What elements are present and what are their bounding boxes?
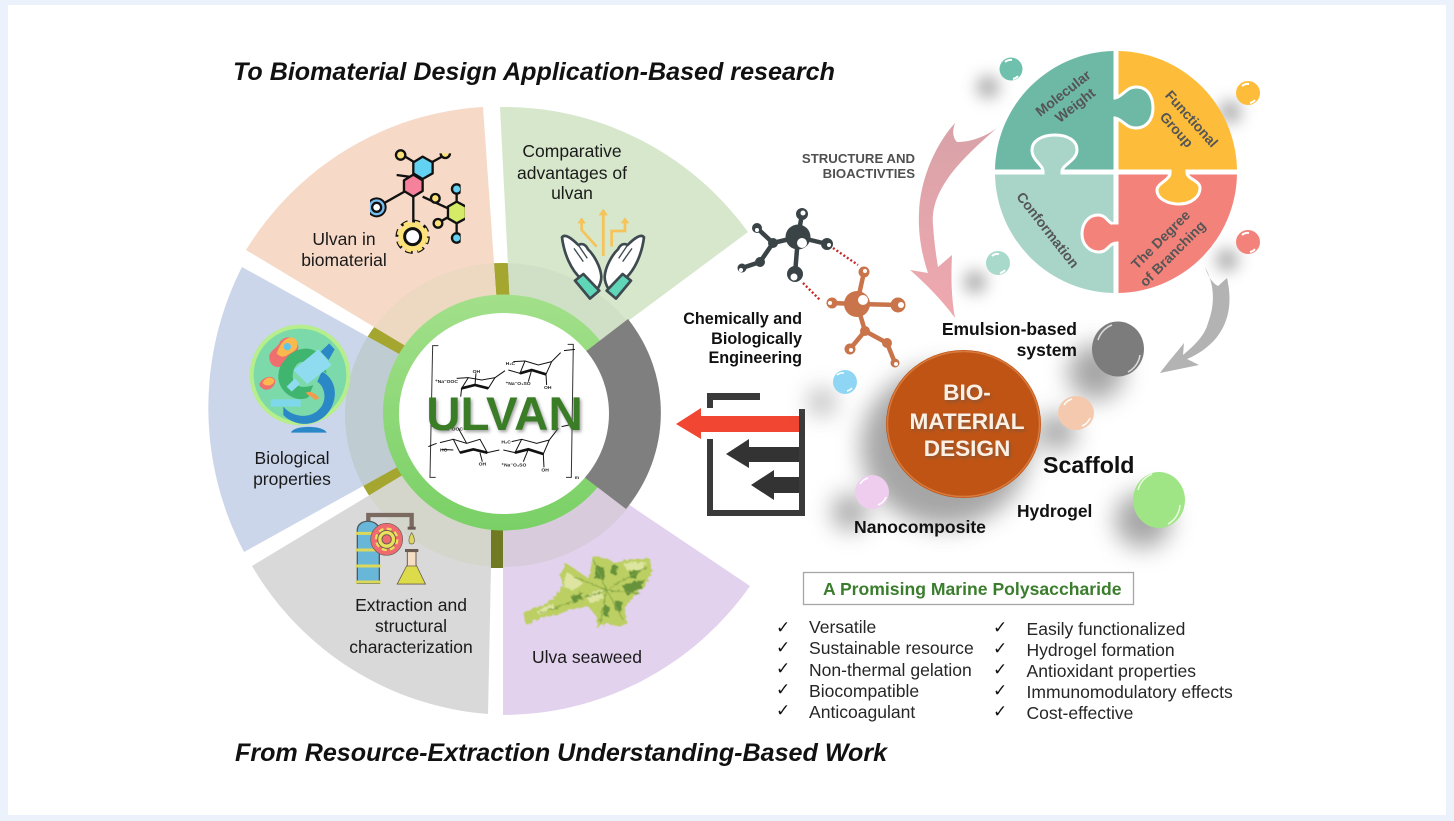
chemical structure of ulvan: m (575, 475, 580, 481)
checklist: right column: Antioxidant properties (1026, 661, 1196, 681)
puzzle piece: molecular weight (995, 51, 1153, 170)
chemical structure of ulvan: ⁺Na⁻OOC (440, 427, 463, 433)
label: Biological properties: Biological (255, 448, 329, 468)
puzzle tab: functional group into branching (1157, 167, 1200, 204)
chemical structure of ulvan: OH (473, 369, 481, 375)
puzzle tab: branching into conformation (1082, 215, 1120, 252)
checklist: left column: ✓ (776, 701, 790, 721)
label: Biological properties: properties (253, 469, 331, 489)
central ULVAN badge (383, 294, 661, 530)
label: Structure and bioactivities: BIOACTIVTIES (823, 166, 915, 181)
checklist: left column: Sustainable resource (809, 638, 974, 658)
puzzle labels: Conformation (1013, 189, 1082, 271)
checklist: right column: Hydrogel formation (1026, 640, 1175, 660)
panel: Ulva seaweed (503, 488, 750, 715)
label: Chemically and Biologically Engineering: Biologically (711, 330, 802, 348)
icon: microscope and cells (252, 327, 348, 433)
puzzle labels: of Branching (1136, 217, 1209, 290)
circle: biomaterial design: DESIGN (924, 436, 1010, 461)
callout: A Promising Marine Polysaccharide: A Promising Marine Polysaccharide (823, 579, 1122, 599)
chemical structure of ulvan: H₃C (506, 361, 516, 367)
checklist: left column: Biocompatible (809, 681, 919, 701)
puzzle labels: Weight (1052, 84, 1098, 126)
label: Chemically and Biologically Engineering: Chemically and (683, 310, 802, 328)
checklist: left column: Anticoagulant (809, 702, 915, 722)
checklist: left column: Non-thermal gelation (809, 660, 972, 680)
checklist: right column: ✓ (993, 702, 1007, 722)
puzzle labels: The Degree (1128, 207, 1193, 272)
chemical structure of ulvan: OH (479, 462, 487, 468)
checklist: right column (993, 618, 1233, 723)
label: Nanocomposite: Nanocomposite (854, 517, 986, 537)
green ring (383, 294, 625, 530)
bonds between molecules (803, 248, 858, 300)
chemical structure of ulvan: HO (440, 447, 448, 453)
label: Emulsion-based system: Emulsion-based (942, 319, 1077, 339)
panel: Ulvan in biomaterial (246, 107, 496, 346)
ball: pink (855, 475, 889, 509)
chemical structure of ulvan: H₃C (501, 440, 511, 446)
label: Emulsion-based system: system (1017, 340, 1077, 360)
puzzle labels (1013, 66, 1221, 290)
label: Extraction and structural characterization: characterization (349, 637, 473, 657)
puzzle piece: conformation (995, 135, 1114, 293)
ULVAN wordmark: ULVAN (426, 388, 583, 441)
label: Ulva seaweed: Ulva seaweed (532, 647, 642, 667)
ball: grey emulsion (1092, 322, 1144, 376)
title: top heading: To Biomaterial Design Application-Based research (233, 58, 835, 86)
callout: A Promising Marine Polysaccharide (804, 572, 1134, 604)
puzzle labels: Group (1157, 109, 1197, 151)
label: Comparative advantages of ulvan: Comparative (522, 141, 622, 161)
arrow: puzzle to biomaterial (grey) (1160, 267, 1230, 373)
icon: orange molecule (826, 266, 906, 368)
label: Comparative advantages of ulvan: ulvan (551, 183, 593, 203)
icon: distillation column and flask (356, 515, 425, 584)
checklist: right column: ✓ (993, 618, 1007, 638)
checklist: right column: Easily functionalized (1026, 619, 1185, 639)
panel: Extraction and structural characterization (252, 476, 492, 714)
label: Structure and bioactivities: STRUCTURE AND (802, 151, 915, 166)
white disc (399, 313, 609, 514)
checklist: right column: ✓ (993, 660, 1007, 680)
chemical structure of ulvan: OH (544, 385, 552, 391)
label: Ulvan in biomaterial: biomaterial (301, 250, 387, 270)
puzzle labels: Functional (1162, 87, 1221, 150)
darker seaweed gap at the bottom of the ring (491, 530, 503, 568)
panel: Comparative advantages of ulvan (500, 107, 748, 340)
checklist: right column: Cost-effective (1026, 703, 1133, 723)
icon: dark molecule (738, 208, 833, 282)
label: Extraction and structural characterization: Extraction and (355, 595, 467, 615)
icon: application arrows box (676, 393, 805, 516)
puzzle labels: Molecular (1032, 66, 1094, 119)
ball: light blue (833, 370, 857, 394)
chemical structure of ulvan: ⁺Na⁻O₃SO (501, 463, 526, 469)
checklist: right column: ✓ (993, 639, 1007, 659)
checklist: right column: Immunomodulatory effects (1026, 682, 1233, 702)
grey sector: application segment (503, 319, 661, 509)
puzzle piece: degree of branching (1118, 174, 1237, 293)
title: bottom heading: From Resource-Extraction Understanding-Based Work (235, 739, 888, 767)
panel: Biological properties (208, 267, 399, 552)
chemical structure of ulvan (428, 344, 580, 481)
icon: ulva seaweed frond (523, 557, 652, 628)
checklist: left column: ✓ (776, 680, 790, 700)
checklist: left column: ✓ (776, 618, 790, 638)
label: Hydrogel: Hydrogel (1017, 501, 1092, 521)
label: Ulvan in biomaterial: Ulvan in (312, 229, 376, 249)
ball: peach (1058, 396, 1094, 430)
label: Extraction and structural characterization: structural (375, 616, 447, 636)
puzzle: molecular structure factors (964, 51, 1241, 293)
icon: molecule with gear (367, 150, 466, 252)
checklist: left column (776, 617, 974, 722)
decorative ball shadows near puzzle (964, 76, 1241, 293)
chemical structure of ulvan: OH (541, 468, 549, 474)
label: Chemically and Biologically Engineering: Engineering (708, 349, 802, 367)
icon: two hands with arrows (562, 209, 644, 299)
checklist: left column: ✓ (776, 638, 790, 658)
ball: green (1133, 472, 1185, 528)
checklist: left column: Versatile (809, 617, 876, 637)
circle: biomaterial design: BIO- (943, 380, 991, 405)
chemical structure of ulvan: ⁺Na⁻OOC (435, 379, 458, 385)
small glossy balls around puzzle (986, 58, 1260, 275)
chemical structure of ulvan: ⁺Na⁻O₃SO (506, 381, 531, 387)
puzzle piece: functional group (1118, 51, 1237, 170)
label: Comparative advantages of ulvan: advantages of (517, 163, 627, 183)
arrow: structure to biomaterial (pink) (910, 123, 997, 318)
checklist: left column: ✓ (776, 659, 790, 679)
checklist: right column: ✓ (993, 681, 1007, 701)
label: Scaffold: Scaffold (1043, 452, 1134, 478)
circle: biomaterial design: MATERIAL (909, 409, 1025, 434)
biomaterial design cluster shadows (810, 344, 1171, 548)
seaweed texture ring behind sectors (345, 263, 661, 567)
circle: biomaterial design (886, 350, 1041, 498)
